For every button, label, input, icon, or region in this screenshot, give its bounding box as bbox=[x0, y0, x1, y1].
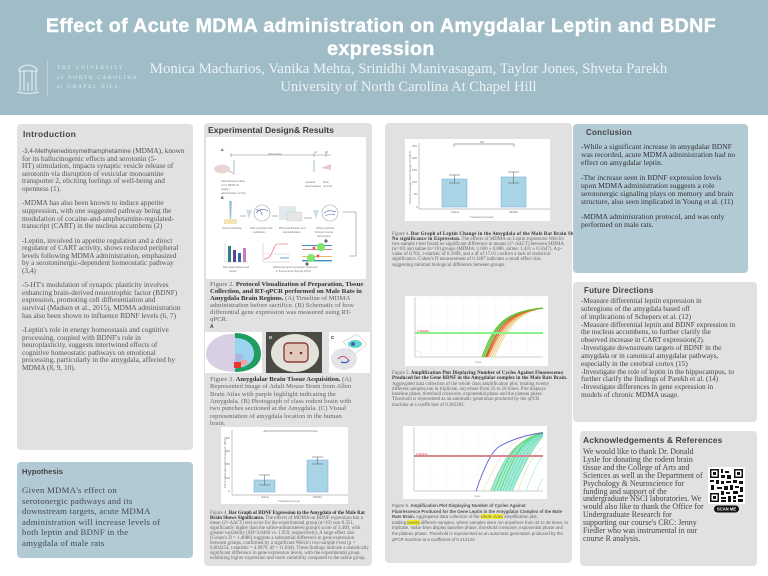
panel: conclusion bbox=[573, 124, 748, 273]
future directions text: further clarify the findings of Parekh et al. (14) bbox=[581, 374, 718, 383]
chart: BDNF bar graph bbox=[221, 427, 348, 504]
figure 4 BDNF caption bbox=[210, 510, 369, 561]
figure 4 BDNF caption: significant difference in gene expression levels, with the experimental group bbox=[210, 551, 360, 556]
logo wordmark: THE UNIVERSITY bbox=[57, 65, 124, 71]
acknowledgements text: Fiedler who was instrumental in our bbox=[583, 526, 697, 535]
figure 2 schematic: results bbox=[229, 269, 237, 273]
hypothesis text: amygdala of male rats bbox=[22, 538, 105, 548]
figure 6 caption: Fluorescence Produced for the Gene Leptin in the Amygdalar Complex of the Male bbox=[392, 509, 562, 514]
hypothesis text: downstream targets, acute MDMA bbox=[22, 506, 151, 516]
experimental design heading: Experimental Design& Results bbox=[208, 125, 334, 135]
future directions text: the nucleus accumbens, to further clarify the bbox=[581, 327, 711, 336]
introduction text: -Leptin's role in energy homeostasis and cognitive bbox=[22, 325, 169, 334]
future directions text: observed increase in CART expression(2). bbox=[581, 335, 705, 344]
introduction text: -MDMA has also been known to induce appetite bbox=[22, 198, 164, 207]
chart: leptin bar graph: Percent Average Fold Change (2^ddCT) bbox=[408, 151, 412, 204]
figure 4 leptin caption bbox=[392, 232, 582, 268]
chart: leptin amplification plot: 0.412122 bbox=[416, 452, 428, 456]
chart: BDNF bar graph: 400 bbox=[225, 436, 230, 440]
introduction text: MDMA (8, 9, 10). bbox=[22, 363, 76, 372]
figure 4 BDNF caption: 0.004254, t-statistic = 4.0879, df = 11.844). These findings indicate a statistically bbox=[210, 546, 369, 551]
introduction text: transcript (CART) in the nucleus accumbens (2) bbox=[22, 221, 162, 230]
figure 2 schematic: through reverse bbox=[315, 230, 334, 234]
acknowledgements text: funding and support of the bbox=[583, 487, 667, 496]
image: human amygdala location bbox=[329, 332, 370, 373]
figure 4 BDNF caption: (Cohen's D = 1.4086) suggests a substantial difference in gene expression bbox=[210, 536, 354, 541]
future directions text: -Investigate differences in gene expression in bbox=[581, 382, 713, 391]
introduction text: HT) stimulation, impacts synaptic vesicle release of bbox=[22, 161, 173, 170]
conclusion heading: Conclusion bbox=[586, 128, 632, 137]
conclusion text: -While a significant increase in amygdalar BDNF bbox=[581, 142, 732, 151]
chart: leptin bar graph: 0 bbox=[416, 205, 418, 209]
acknowledgements text: would also like to thank the Office for bbox=[583, 502, 704, 511]
figure 3 caption: brain. bbox=[210, 420, 225, 427]
chart: leptin bar graph: MDMA bbox=[509, 210, 518, 214]
figure 2 schematic: removal bbox=[323, 184, 333, 188]
chart: BDNF bar graph: Saline bbox=[261, 495, 270, 499]
conclusion text: was recorded, acute MDMA administration had no bbox=[581, 150, 735, 159]
figure 2 schematic bbox=[206, 137, 366, 279]
introduction text: modulation of cocaine-and-amphetamine-regulated- bbox=[22, 214, 174, 223]
figure 2 schematic: 24 bbox=[325, 150, 328, 154]
figure 5 caption: Aggregated data collection of the whole class amplification plot, totaling twenty bbox=[392, 382, 549, 387]
panel: acknowledgements bbox=[580, 431, 757, 566]
figure 3 caption: representation of amygdala location in the human bbox=[210, 413, 342, 420]
figure 2 schematic: (n=x) MDMA 10 bbox=[221, 183, 240, 187]
figure 6 caption: Figure 6. Amplification Plot Displaying Number of Cycles Against bbox=[392, 503, 526, 508]
introduction text: expression, promoting cell differentiation and bbox=[22, 295, 155, 304]
chart: leptin bar graph: NS bbox=[480, 140, 484, 144]
future directions text: subregions of the amygdala based off bbox=[581, 304, 690, 313]
figure 2 schematic: Subcutaneous saline bbox=[221, 179, 246, 183]
panel: hypothesis bbox=[17, 462, 193, 558]
chart: BDNF amplification plot bbox=[405, 296, 548, 366]
chart: leptin bar graph bbox=[405, 139, 550, 221]
future directions text: -Measure differential leptin expression in bbox=[581, 296, 702, 305]
acknowledgements text: undergraduate NSCI laboratories. We bbox=[583, 494, 701, 503]
figure 2 schematic: Differential gene expression measured bbox=[273, 265, 318, 269]
panel: results figures bbox=[385, 123, 572, 563]
figure 2 caption: Collection, and RT-qPCR performed on Male Rats in bbox=[210, 288, 362, 295]
chart: leptin bar graph: 200 bbox=[412, 156, 417, 160]
chart: leptin bar graph: Saline bbox=[451, 210, 460, 214]
introduction text: -3,4-Methylenedioxymethamphetamine (MDMA), known bbox=[22, 146, 185, 155]
title: expression bbox=[327, 38, 435, 60]
chart: BDNF bar graph: Percent Average Fold Change (2^-ddCT) bbox=[223, 437, 227, 488]
hypothesis text bbox=[22, 485, 160, 548]
chart: leptin bar graph: 250 bbox=[412, 144, 417, 148]
figure 4 leptin caption: (n=10) and saline (n=10) groups (MDMA: 1.600 ± 0.886, saline: 1.431 ± 0.5647). A p- bbox=[392, 247, 562, 252]
introduction heading: Introduction bbox=[23, 129, 76, 139]
figure 5 caption: baseline phase, threshold crossover, exponential phase and the plateau phase. bbox=[392, 392, 543, 397]
introduction text: transporter 2, eliciting feelings of well-being and bbox=[22, 176, 165, 185]
hypothesis heading: Hypothesis bbox=[22, 467, 63, 476]
figure 2 schematic: Tissue binarizing bbox=[222, 226, 242, 230]
figure 6 caption: totaling twenty different samples, where samples were run anywhere from 32 to 39 times, in bbox=[392, 520, 568, 525]
figure 4 BDNF caption: between groups, confirmed by a significant Welch's two-sample t-test (p = bbox=[210, 541, 355, 546]
hypothesis text: Given MDMA's effect on bbox=[22, 485, 117, 495]
figure 2 caption: Figure 2. Protocol Visualization of Preparation, Tissue bbox=[210, 281, 363, 288]
figure 3 caption bbox=[210, 376, 352, 427]
figure 2 schematic: RNA extraction and bbox=[250, 226, 273, 230]
image: mouse brain atlas bbox=[205, 332, 262, 373]
image: rodent brain punches: B bbox=[269, 335, 273, 340]
introduction text: by a serotoninergic-dependent homeostatic pathway bbox=[22, 258, 174, 267]
future directions text bbox=[581, 296, 736, 399]
introduction text: suppression, with one suggested pathway being the bbox=[22, 206, 171, 215]
conclusion text: performed on male rats. bbox=[581, 220, 654, 229]
chart: BDNF amplification plot: Cycle bbox=[475, 360, 482, 364]
figure 5 caption: Produced for the Gene BDNF in the Amygdalar complex in the Male Rats Brain. bbox=[392, 376, 567, 381]
figure 2 schematic: B. bbox=[221, 196, 225, 200]
figure 5 caption: machine at a coefficient of 0.382283. bbox=[392, 403, 465, 408]
figure 5 caption: different samples,run in triplicate, anywhere from 25 to 28 times. Plot displays bbox=[392, 387, 546, 392]
figure 2 schematic: in fluorescence through qPCR bbox=[276, 269, 311, 273]
figure 2 caption: administration before sacrifice. (B) Schematic of how bbox=[210, 302, 354, 309]
title bbox=[46, 15, 716, 60]
affiliation: University of North Carolina At Chapel Hill bbox=[280, 79, 537, 95]
logo wordmark: of NORTH CAROLINA bbox=[57, 74, 138, 80]
figure 2 schematic: brain bbox=[323, 180, 329, 184]
future directions text: -Investigate downstream targets of BDNF in the bbox=[581, 343, 722, 352]
panel: introduction bbox=[17, 124, 193, 450]
icon: QR code: SCAN ME bbox=[717, 507, 736, 512]
figure 5 caption bbox=[392, 370, 567, 408]
chart: leptin bar graph: 100 bbox=[412, 180, 417, 184]
figure 5 caption: Threshold is represented as an automatic generation produced by the qPCR bbox=[392, 397, 539, 402]
introduction text: levels following MDMA administration, emphasized bbox=[22, 251, 176, 260]
acknowledgements text: Undergraduate Research for bbox=[583, 510, 672, 519]
chart: leptin amplification plot: Cycle bbox=[474, 494, 481, 498]
future directions heading: Future Directions bbox=[584, 286, 654, 295]
figure 4 leptin caption: suggesting minimal biological difference between groups. bbox=[392, 263, 505, 268]
hypothesis text: administration will increase levels of bbox=[22, 517, 160, 527]
introduction text: neuroplasticity, suggests intertwined effects of bbox=[22, 340, 157, 349]
figure 3 caption: Amygdala. (B) Photograph of class rodent brain with bbox=[210, 398, 351, 405]
chart: leptin bar graph: 150 bbox=[412, 168, 417, 172]
figure 4 BDNF caption: mean (2^-ΔΔCT) test score for the experimental group (n=10) was 8.351, bbox=[210, 521, 354, 526]
panel: future directions bbox=[573, 282, 757, 422]
future directions text: models of chronic MDMA usage. bbox=[581, 390, 679, 399]
introduction text: -Leptin, involved in appetite regulation and a direct bbox=[22, 236, 172, 245]
introduction text: openness (1). bbox=[22, 184, 61, 193]
figure 2 schematic: mg/kg x bbox=[221, 187, 231, 191]
acknowledgements text: Sciences as well as the Department of bbox=[583, 471, 703, 480]
introduction text: has also been shown to influence BDNF levels (6, 7) bbox=[22, 311, 176, 320]
acknowledgements text: supporting our course's CRC: Jenny bbox=[583, 518, 697, 527]
chart: BDNF bar graph: 200 bbox=[225, 462, 230, 466]
future directions text: of implications of Schepers et al. (12) bbox=[581, 312, 691, 321]
introduction text: enhancing brain-derived neurotrophic factor (BDNF) bbox=[22, 288, 177, 297]
figure 4 leptin caption: significance. Cohen's D measurement of 0.1487 indicates a small effect size, bbox=[392, 257, 542, 262]
acknowledgements text: tissue and the College of Arts and bbox=[583, 463, 690, 472]
header banner bbox=[0, 0, 768, 115]
figure 2 caption: Amygdala Brain Regions. (A) Timeline of MDMA bbox=[210, 295, 350, 302]
figure 4 leptin caption: No significance in Expression. The effects of MDMA on Leptin expression Welch's bbox=[392, 237, 564, 242]
hypothesis text: both leptin and BDNF in the bbox=[22, 527, 128, 537]
figure 3 caption: Represented image of Adult Mouse Brain from Allen bbox=[210, 383, 351, 390]
introduction text: -5-HT's modulation of synaptic plasticity involves bbox=[22, 280, 169, 289]
chart: BDNF amplification plot: 0.382283 bbox=[417, 329, 429, 333]
acknowledgements text: course R analysis. bbox=[583, 534, 640, 543]
figure 3 caption: two punches sectioned at the Amygdala. (C) Visual bbox=[210, 405, 346, 412]
figure 2 schematic: RNA quantification and bbox=[279, 226, 306, 230]
figure 6 caption: triplicate. Value lines display baseline phase, threshold crossover, exponential phase and bbox=[392, 525, 563, 530]
chart: BDNF bar graph: 0 bbox=[228, 489, 230, 493]
introduction text: serotonin via disruption of vesicular monoamine bbox=[22, 169, 164, 178]
figure 2 schematic: Time (hrs) bbox=[268, 152, 282, 156]
figure 2 caption: differential gene expression was measured using RT- bbox=[210, 309, 351, 316]
figure 4 BDNF caption: significantly higher than the saline-administered group's score of 3.409, with bbox=[210, 526, 360, 531]
figure 2 schematic: Raw data analysis and bbox=[223, 265, 250, 269]
future directions text: -Measure differential leptin and BDNF expression in bbox=[581, 320, 735, 329]
acknowledgements text bbox=[583, 447, 704, 543]
conclusion text: -The increase seen in BDNF expression levels bbox=[581, 173, 721, 182]
figure 2 schematic: repeated bbox=[305, 180, 316, 184]
future directions text: amygdala or in canonical amygdalar pathways, bbox=[581, 351, 718, 360]
introduction text bbox=[22, 146, 185, 372]
hypothesis text: serotonergic pathways and its bbox=[22, 496, 133, 506]
figure 4 leptin caption: value of 0.701, t-statistic of 0.3909, and a df of 17.01 confirm a lack of statistical bbox=[392, 252, 551, 257]
future directions text: especially in the cerebral cortex (15) bbox=[581, 359, 688, 368]
figure 2 schematic: administration bbox=[305, 184, 322, 188]
figure 2 schematic: administration (n=10) bbox=[221, 191, 246, 195]
introduction text: cognitive homeostatic pathways on emotional bbox=[22, 348, 156, 357]
chart: leptin bar graph: Treatment groups bbox=[470, 215, 494, 219]
figure 6 caption: Rats Brain. Aggregated data collection of the whole class amplification plot, bbox=[392, 514, 538, 519]
label A: A bbox=[210, 324, 214, 330]
acknowledgements heading: Acknowledgements & References bbox=[583, 435, 722, 445]
figure 4 leptin caption: two-sample t-test found no significant difference in means (2^-ΔΔCT) between MDMA bbox=[392, 242, 564, 247]
chart: leptin bar graph: 50 bbox=[414, 192, 418, 196]
title: Effect of Acute MDMA administration on Amygdalar Leptin and BDNF bbox=[46, 15, 716, 37]
figure 5 caption: Figure 5. Amplification Plot Displaying Number of Cycles Against Fluorescence bbox=[392, 371, 563, 376]
conclusion text: -MDMA administration protocol, and was only bbox=[581, 212, 724, 221]
acknowledgements text: Lysle for donating the rodent brain bbox=[583, 455, 693, 464]
figure 4 BDNF caption: Figure 4. Bar Graph of BDNF Expression in the Amygdala of the Male Rat bbox=[210, 511, 365, 516]
figure 2 caption bbox=[210, 281, 364, 323]
chart: BDNF bar graph: 300 bbox=[225, 449, 230, 453]
logo wordmark bbox=[57, 65, 138, 90]
figure 4 BDNF caption: Brain Shows Significance. The effects of MDMA on BDNF expression has a bbox=[210, 516, 363, 521]
icon: UNC Old Well logo bbox=[16, 60, 48, 96]
introduction text: processing, coupled with BDNF's role in bbox=[22, 333, 141, 342]
acknowledgements text: Psychology & Neuroscience for bbox=[583, 479, 684, 488]
acknowledgements text: We would like to thank Dr. Donald bbox=[583, 447, 693, 456]
introduction text: (3,4) bbox=[22, 266, 36, 275]
figure 4 BDNF caption: greater variability (SD=3.8469 vs. 1.959, respectively). A large effect size bbox=[210, 531, 354, 536]
figure 6 caption: qPCR machine at a coefficient of 0.412122. bbox=[392, 537, 476, 542]
introduction text: survival (Madsen et al., 2015), MDMA administration bbox=[22, 303, 180, 312]
chart: BDNF bar graph: 100 bbox=[225, 476, 230, 480]
figure 3 caption: Brain Atlas with purple highlight indicating the bbox=[210, 391, 336, 398]
figure 4 leptin caption: Figure 4. Bar Graph of Leptin Change in the Amygdala of the Male Rat Brain Shows bbox=[392, 232, 582, 237]
logo wordmark: at CHAPEL HILL bbox=[57, 84, 120, 90]
figure 2 schematic: transcription bbox=[317, 234, 332, 238]
figure 6 caption: the plateau phase. Threshold is represented as an automatic generation produced by the bbox=[392, 531, 563, 536]
figure 2 schematic: A. bbox=[221, 148, 225, 152]
conclusion text: structure, also seen implicated in Young et al. (11) bbox=[581, 197, 733, 206]
image: human amygdala location: C bbox=[331, 335, 335, 340]
figure 2 schematic: cDNA synthesis bbox=[316, 226, 335, 230]
future directions text: -Investigate the role of leptin in the hippocampus, to bbox=[581, 367, 734, 376]
conclusion text: upon MDMA administration suggests a role bbox=[581, 181, 715, 190]
chart: BDNF bar graph: Treatment group bbox=[278, 499, 300, 503]
figure 4 BDNF caption: exhibiting higher expression and more variability compared to the saline group. bbox=[210, 556, 366, 561]
figure 2 schematic: 12 bbox=[314, 150, 317, 154]
introduction text: for its hallucinogenic effects and serotonin (5- bbox=[22, 154, 157, 163]
figure 3 caption: Figure 3. Amygdalar Brain Tissue Acquisition. (A) bbox=[210, 376, 351, 383]
panel: experimental design and results bbox=[204, 123, 372, 566]
introduction text: regulator of CART activity, shows reduced peripheral bbox=[22, 243, 178, 252]
conclusion text: serotonergic signaling plays on memory and brain bbox=[581, 189, 733, 198]
figure 2 caption: qPCR. bbox=[210, 316, 228, 323]
introduction text: processing, particularly in the amygdala, affected by bbox=[22, 355, 175, 364]
conclusion text bbox=[581, 142, 735, 229]
icon: QR code bbox=[708, 467, 745, 512]
chart: leptin amplification plot bbox=[403, 426, 547, 499]
conclusion text: effect on amygdalar leptin. bbox=[581, 158, 663, 167]
figure 2 schematic: standardization bbox=[283, 230, 301, 234]
authors: Monica Macharios, Vanika Mehta, Srinidhi Manivasagam, Taylor Jones, Shveta Parekh bbox=[150, 61, 667, 77]
figure 6 caption bbox=[392, 503, 568, 542]
image: rodent brain punches bbox=[266, 332, 322, 373]
chart: BDNF bar graph: MDMA bbox=[313, 495, 322, 499]
figure 2 schematic: purification bbox=[253, 230, 266, 234]
